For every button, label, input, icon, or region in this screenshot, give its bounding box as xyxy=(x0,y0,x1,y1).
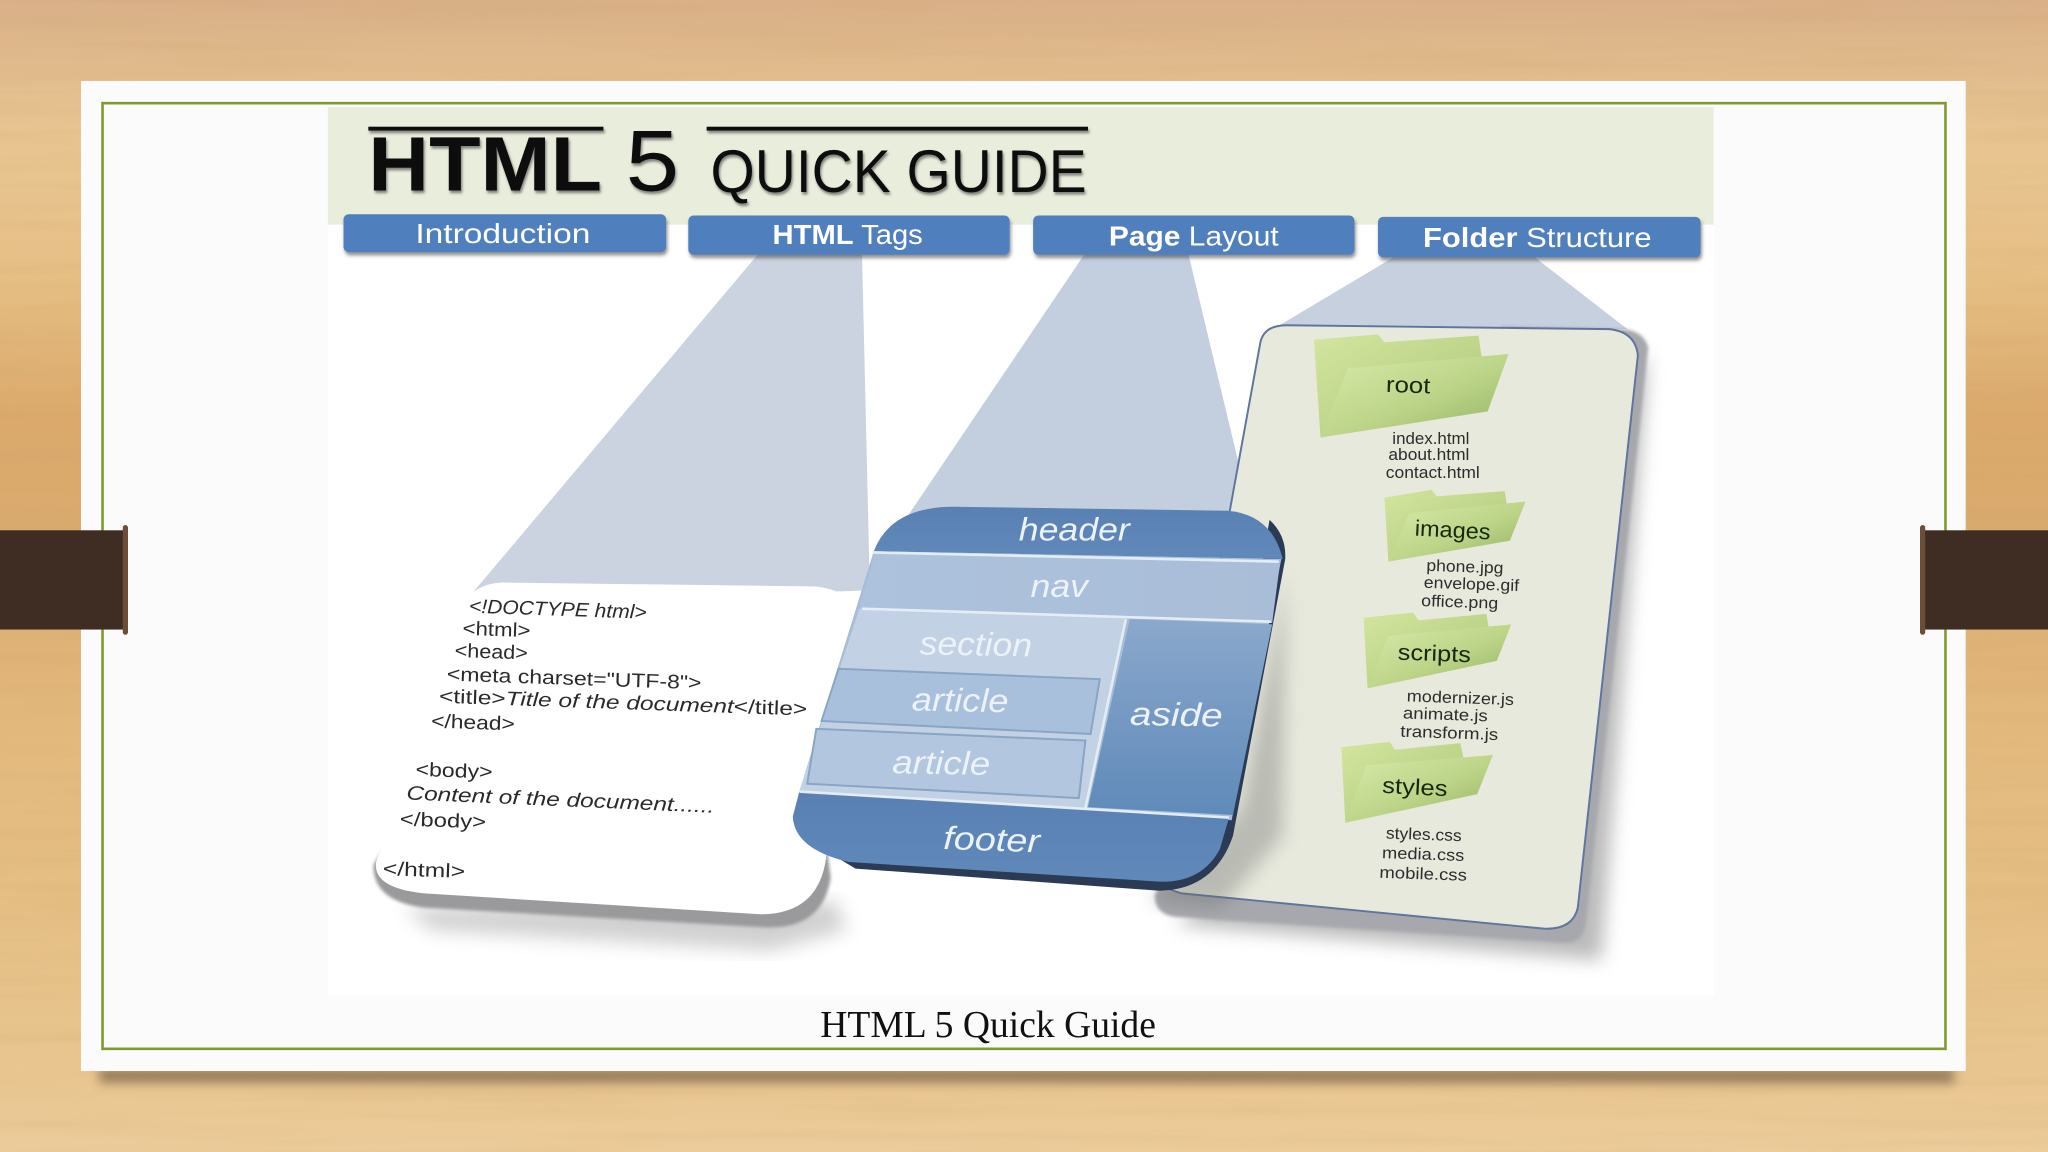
code lines: <html> xyxy=(462,618,531,642)
beam: folder structure xyxy=(1277,257,1627,329)
title: 5 xyxy=(626,114,679,210)
layout: aside: aside xyxy=(1130,695,1223,734)
file list: scripts: transform.js xyxy=(1400,723,1499,744)
file list: images: phone.jpg xyxy=(1426,557,1504,577)
code lines xyxy=(383,596,808,883)
code lines: <meta charset="UTF-8"> xyxy=(447,664,702,694)
code lines: <head> xyxy=(454,640,528,665)
layout: nav: nav xyxy=(1031,567,1090,604)
layout: section: section xyxy=(919,624,1032,663)
tab: Introduction: Introduction xyxy=(415,218,590,249)
caption: HTML 5 Quick Guide xyxy=(820,1004,1156,1046)
layout: article 2 xyxy=(807,729,1085,798)
dark edge xyxy=(823,520,1285,891)
folder: scripts: scripts xyxy=(1397,640,1471,667)
white divider lines xyxy=(799,552,1279,818)
tab: Introduction xyxy=(344,214,666,252)
title xyxy=(368,114,1088,210)
tab: HTML Tags xyxy=(688,216,1010,255)
folder: images xyxy=(1384,490,1526,562)
code lines: </body> xyxy=(399,808,486,833)
code lines: <body> xyxy=(415,759,493,784)
file list: root: contact.html xyxy=(1386,464,1480,482)
layout: footer: footer xyxy=(943,819,1042,859)
file list: scripts: modernizer.js xyxy=(1407,687,1514,709)
tab: HTML Tags: HTML Tags xyxy=(773,219,923,250)
side tab: left dark binder xyxy=(0,525,128,635)
beam: page layout xyxy=(905,255,1243,520)
panel: title band xyxy=(328,107,1714,225)
file list: styles xyxy=(1379,825,1467,885)
folder: images: images xyxy=(1414,516,1491,544)
reference image area xyxy=(328,107,1714,995)
layout: footer xyxy=(793,792,1229,882)
tab: Folder Structure xyxy=(1378,217,1701,257)
file list: styles: media.css xyxy=(1382,844,1465,865)
code lines: <!DOCTYPE html> xyxy=(469,596,647,624)
layout: article 1: article xyxy=(912,681,1009,719)
layout: section xyxy=(799,609,1126,810)
panel: folder structure card xyxy=(1155,325,1648,960)
file list: images xyxy=(1421,557,1520,613)
folder: styles: styles xyxy=(1382,773,1448,801)
folder: root: root xyxy=(1386,372,1431,398)
code lines: </head> xyxy=(431,711,515,735)
title: QUICK GUIDE xyxy=(711,138,1087,205)
layout: article 1 xyxy=(822,669,1100,734)
tab: Page Layout xyxy=(1033,216,1354,255)
file list: styles: styles.css xyxy=(1386,825,1462,845)
file list: root: index.html xyxy=(1392,430,1469,448)
folder: styles xyxy=(1341,742,1493,823)
panel: white slide xyxy=(81,81,1966,1071)
file list: scripts: animate.js xyxy=(1403,704,1488,725)
code lines: Content of the document...... xyxy=(406,782,715,818)
layout base plate xyxy=(799,551,1281,820)
panel: HTML code card xyxy=(374,583,859,951)
slide green border xyxy=(103,103,1945,1049)
tab: Page Layout: Page Layout xyxy=(1109,221,1279,252)
layout: header xyxy=(874,507,1283,559)
tab: Folder Structure: Folder Structure xyxy=(1423,222,1652,253)
code lines: </html> xyxy=(383,858,466,883)
file list: images: office.png xyxy=(1421,592,1499,613)
layout: article 2: article xyxy=(892,743,991,782)
file list: scripts xyxy=(1400,687,1514,744)
layout: nav xyxy=(859,554,1280,623)
folder: root xyxy=(1314,334,1509,438)
file list: root xyxy=(1386,430,1480,482)
beam: HTML tags xyxy=(464,255,870,603)
file list: images: envelope.gif xyxy=(1424,574,1520,595)
layout: header: header xyxy=(1019,511,1131,548)
folder: scripts xyxy=(1364,613,1511,688)
layout: aside xyxy=(1088,619,1272,815)
panel: page layout diagram xyxy=(793,507,1285,908)
file list: root: about.html xyxy=(1388,446,1469,464)
code lines: <title> Title of the document </title> xyxy=(439,686,808,721)
side tab: right dark binder xyxy=(1920,525,2048,635)
navigation tabs xyxy=(344,214,1701,257)
title: HTML xyxy=(368,122,602,208)
file list: styles: mobile.css xyxy=(1379,864,1467,885)
slide shadow xyxy=(99,1068,1954,1083)
